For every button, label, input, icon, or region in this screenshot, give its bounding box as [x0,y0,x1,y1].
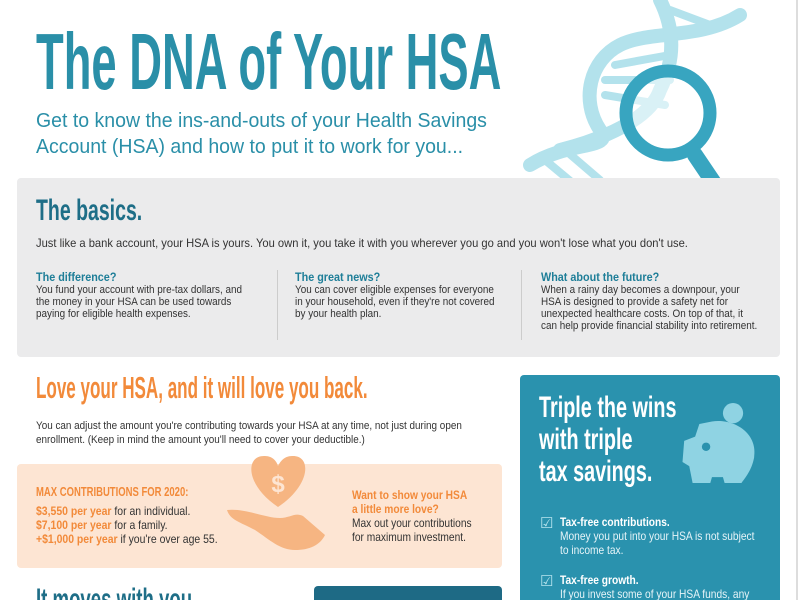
column: difference: You fund your account with pre-tax dollars, and [36,284,242,296]
column: great news: The great news? [295,270,380,284]
panel: max contributions [17,464,502,568]
item: growth [560,573,750,600]
triple heading [538,391,677,488]
column: future [541,270,757,332]
icon: heart in hand: $ [271,471,285,498]
title: The DNA of Your HSA [36,17,501,106]
max heading: MAX CONTRIBUTIONS FOR 2020: [36,484,188,499]
triple heading: with triple [539,423,633,456]
item: contributions [560,515,754,557]
panel: triple tax: ☑ [540,573,553,590]
max list: $7,100 per year for a family. [36,518,168,532]
column: difference: the money in your HSA can be used towards [36,296,231,308]
panel: triple tax: ☑ [540,515,553,532]
max list: $3,550 per year for an individual. [36,504,190,518]
dark box bottom [314,586,502,600]
max list [36,504,218,546]
right edge line [796,0,798,600]
item: contributions: Money you put into your HSA is not subject [560,529,754,543]
column: difference: The difference? [36,270,116,284]
column: future: can help provide financial stability into retirement. [541,320,757,332]
panel: triple tax [520,375,780,600]
item: contributions: to income tax. [560,543,623,557]
heading: love your HSA: Love your HSA, and it will love you back. [36,370,368,405]
column: future: What about the future? [541,270,659,284]
column: difference: paying for eligible health expenses. [36,308,191,320]
column: future: When a rainy day becomes a downpour, your [541,284,740,296]
love text [36,420,462,446]
column: difference [36,270,242,320]
column: great news: in your household, even if they're not covered [295,296,494,308]
heading: the basics: The basics. [36,194,142,227]
subtitle: Get to know the ins-and-outs of your Health Savings [36,110,487,132]
love text: You can adjust the amount you're contributing towards your HSA at any time, not just during open [36,420,462,432]
column: great news: You can cover eligible expenses for everyone [295,284,494,296]
love text: enrollment. (Keep in mind the amount you'll need to cover your deductible.) [36,434,365,446]
column: great news: by your health plan. [295,308,381,320]
triple heading: Triple the wins [539,391,677,424]
icon: DNA with magnifier [523,0,747,178]
subtitle [36,110,487,158]
callout: more love [352,488,472,544]
panel: basics [17,178,780,357]
callout: more love: a little more love? [352,502,439,516]
intro text: Just like a bank account, your HSA is yours. You own it, you take it with you wherever you go and you won't lose what you don't use. [36,236,688,250]
column: future: unexpected healthcare costs. On top of that, it [541,308,743,320]
triple heading: tax savings. [539,455,652,488]
callout: more love: Max out your contributions [352,516,472,530]
callout: more love: Want to show your HSA [352,488,467,502]
max list: +$1,000 per year if you're over age 55. [36,532,218,546]
column: future: HSA is designed to provide a safety net for [541,296,728,308]
item: growth: Tax-free growth. [560,573,639,587]
subtitle: Account (HSA) and how to put it to work for you... [36,136,463,158]
callout: more love: for maximum investment. [352,530,466,544]
item: contributions: Tax-free contributions. [560,515,670,529]
icon: piggy bank [682,403,754,483]
icon: heart in hand [227,456,325,550]
column: great news [295,270,494,320]
